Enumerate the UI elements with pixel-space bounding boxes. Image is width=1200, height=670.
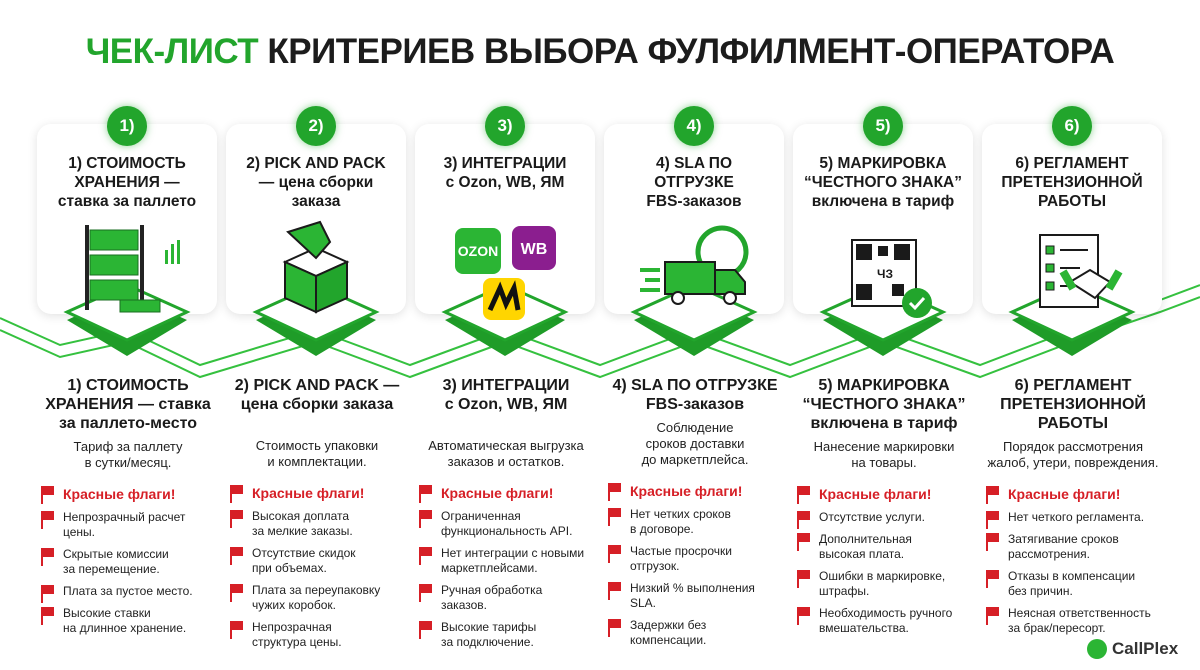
icon: marketplace logos: OZON [458,243,498,259]
icon: marketplace logos [455,226,556,320]
column 3 text: заказов. [441,598,487,612]
column 4 text: Красные флаги! [630,483,742,499]
badge 3: 3) [497,116,513,135]
column 4 text: Частые просрочки [630,544,732,558]
column 1 text: за перемещение. [63,562,160,576]
column 4 text: Низкий % выполнения [630,581,755,595]
column 2 text: цена сборки заказа [241,396,393,413]
column 1 text: Непрозрачный расчет [63,510,185,524]
column 6 text: Нет четкого регламента. [1008,510,1144,524]
column 2 text: 2) PICK AND PACK — [235,377,399,394]
column 3 text: Ограниченная [441,509,521,523]
icon: QR code with check [852,240,932,318]
column 1 text: Тариф за паллету [73,439,183,454]
column 3 text: заказов и остатков. [448,454,564,469]
column 2 text: Стоимость упаковки [256,438,378,453]
column 3 text: Высокие тарифы [441,620,536,634]
column 1 text: Высокие ставки [63,606,151,620]
logo: CallPlex [1087,639,1178,659]
column 5 text [797,377,966,635]
column 6 text: рассмотрения. [1008,547,1090,561]
column 4 text: в договоре. [630,522,694,536]
panel 6 card [982,124,1162,314]
column 3 text [419,377,584,649]
logo: CallPlex: CallPlex [1112,639,1178,658]
column 1 text [41,377,211,635]
column 1 text: 1) СТОИМОСТЬ [67,377,189,394]
column 4 text [608,377,778,647]
column 4 text: отгрузок. [630,559,679,573]
column 4 text: до маркетплейса. [642,452,748,467]
column 6 text: Отказы в компенсации [1008,569,1135,583]
column 5 text: Ошибки в маркировке, [819,569,945,583]
icon: marketplace logos: WB [521,241,547,258]
column 5 text: Отсутствие услуги. [819,510,925,524]
column 4 text: 4) SLA ПО ОТГРУЗКЕ [612,377,778,394]
column 1 text: цены. [63,525,95,539]
column 4 text: Соблюдение [656,420,734,435]
column 5 text: Дополнительная [819,532,912,546]
panel 3 card [415,124,595,314]
column 4 text: FBS-заказов [646,396,744,413]
column 1 text: Скрытые комиссии [63,547,169,561]
icon: document with handshake [1040,235,1122,307]
column 2 text: и комплектации. [267,454,367,469]
panel 6 card: РАБОТЫ [1038,193,1106,210]
panel 1 card [37,124,217,314]
column 6 text: 6) РЕГЛАМЕНТ [1015,377,1131,394]
column 5 text: Нанесение маркировки [814,439,954,454]
panel 3 card: с Ozon, WB, ЯМ [446,174,564,191]
column 6 text: ПРЕТЕНЗИОННОЙ [1000,396,1146,413]
panel 4 card [604,124,784,314]
column 2 text: структура цены. [252,635,342,649]
column 3 text: за подключение. [441,635,534,649]
icon: warehouse rack [85,225,180,312]
column 5 text: 5) МАРКИРОВКА [818,377,950,394]
column 2 text [230,377,400,649]
badge 2 [296,106,336,146]
badge 4: 4) [686,116,702,135]
column 4 text: SLA. [630,596,656,610]
badge 2: 2) [308,116,324,135]
panel 5 card: 5) МАРКИРОВКА [819,155,947,172]
column 3 text: функциональность API. [441,524,572,538]
panel 1 card: ХРАНЕНИЯ — [74,174,180,191]
panel 1 card: 1) СТОИМОСТЬ [68,155,186,172]
panel 4 card: 4) SLA ПО [656,155,732,172]
column 6 text: Неясная ответственность [1008,606,1151,620]
badge 5: 5) [875,116,891,135]
column 3 text: Нет интеграции с новыми [441,546,584,560]
column 2 text: Непрозрачная [252,620,332,634]
column 1 text: ХРАНЕНИЯ — ставка [45,396,211,413]
column 3 text: Красные флаги! [441,485,553,501]
icon: QR code with check: ЧЗ [877,267,893,281]
column 6 text: жалоб, утери, повреждения. [988,455,1158,470]
column 1 text: в сутки/месяц. [85,455,171,470]
column 6 text [986,377,1158,635]
column 3 text: маркетплейсами. [441,561,538,575]
badge 1 [107,106,147,146]
column 2 text: Высокая доплата [252,509,349,523]
column 5 text: штрафы. [819,584,869,598]
column 3 text: Автоматическая выгрузка [428,438,584,453]
column 6 text: РАБОТЫ [1038,415,1108,432]
column 1 text: Плата за пустое место. [63,584,193,598]
column 2 text: чужих коробок. [252,598,336,612]
column 5 text: Красные флаги! [819,486,931,502]
panel 5 card [793,124,973,314]
column 2 text: за мелкие заказы. [252,524,353,538]
column 2 text: при объемах. [252,561,327,575]
column 6 text: Красные флаги! [1008,486,1120,502]
column 5 text: Необходимость ручного [819,606,952,620]
column 4 text: сроков доставки [646,436,744,451]
panel 6 card: 6) РЕГЛАМЕНТ [1015,155,1129,172]
column 6 text: без причин. [1008,584,1073,598]
panel 5 card: “ЧЕСТНОГО ЗНАКА” [804,174,962,191]
badge 5 [863,106,903,146]
column 2 text: Отсутствие скидок [252,546,356,560]
panel 2 card: — цена сборки [259,174,373,191]
panel 2 card [226,124,406,314]
panel 3 card: 3) ИНТЕГРАЦИИ [444,155,566,172]
column 6 text: за брак/пересорт. [1008,621,1106,635]
panel 6 card: ПРЕТЕНЗИОННОЙ [1001,174,1143,191]
column 6 text: Порядок рассмотрения [1003,439,1143,454]
badge 4 [674,106,714,146]
badge 1: 1) [119,116,135,135]
panel 1 card: ставка за паллето [58,193,196,210]
column 6 text: Затягивание сроков [1008,532,1119,546]
column 5 text: включена в тариф [810,415,958,432]
column 1 text: за паллето-место [59,415,197,432]
badge 6: 6) [1064,116,1080,135]
panel 2 card: заказа [292,193,340,210]
title: ЧЕК-ЛИСТ КРИТЕРИЕВ ВЫБОРА ФУЛФИЛМЕНТ-ОПЕРАТОРА [86,32,1114,71]
panel 5 card: включена в тариф [812,193,954,210]
badge 3 [485,106,525,146]
column 5 text: вмешательства. [819,621,909,635]
icon: box with hand [285,222,347,312]
column 3 text: 3) ИНТЕГРАЦИИ [443,377,569,394]
panel 4 card: ОТГРУЗКЕ [654,174,734,191]
column 1 text: Красные флаги! [63,486,175,502]
panel 4 card: FBS-заказов [646,193,742,210]
badge 6 [1052,106,1092,146]
column 5 text: на товары. [851,455,917,470]
column 2 text: Плата за переупаковку [252,583,380,597]
column 5 text: высокая плата. [819,547,904,561]
panel 2 card: 2) PICK AND PACK [246,155,386,172]
icon: truck with stopwatch [640,228,746,304]
column 4 text: Нет четких сроков [630,507,731,521]
column 3 text: Ручная обработка [441,583,542,597]
badges [102,101,1097,151]
column 3 text: с Ozon, WB, ЯМ [445,396,567,413]
column 5 text: “ЧЕСТНОГО ЗНАКА” [802,396,966,413]
column 4 text: Задержки без [630,618,706,632]
column 2 text: Красные флаги! [252,485,364,501]
column 4 text: компенсации. [630,633,706,647]
column 1 text: на длинное хранение. [63,621,186,635]
